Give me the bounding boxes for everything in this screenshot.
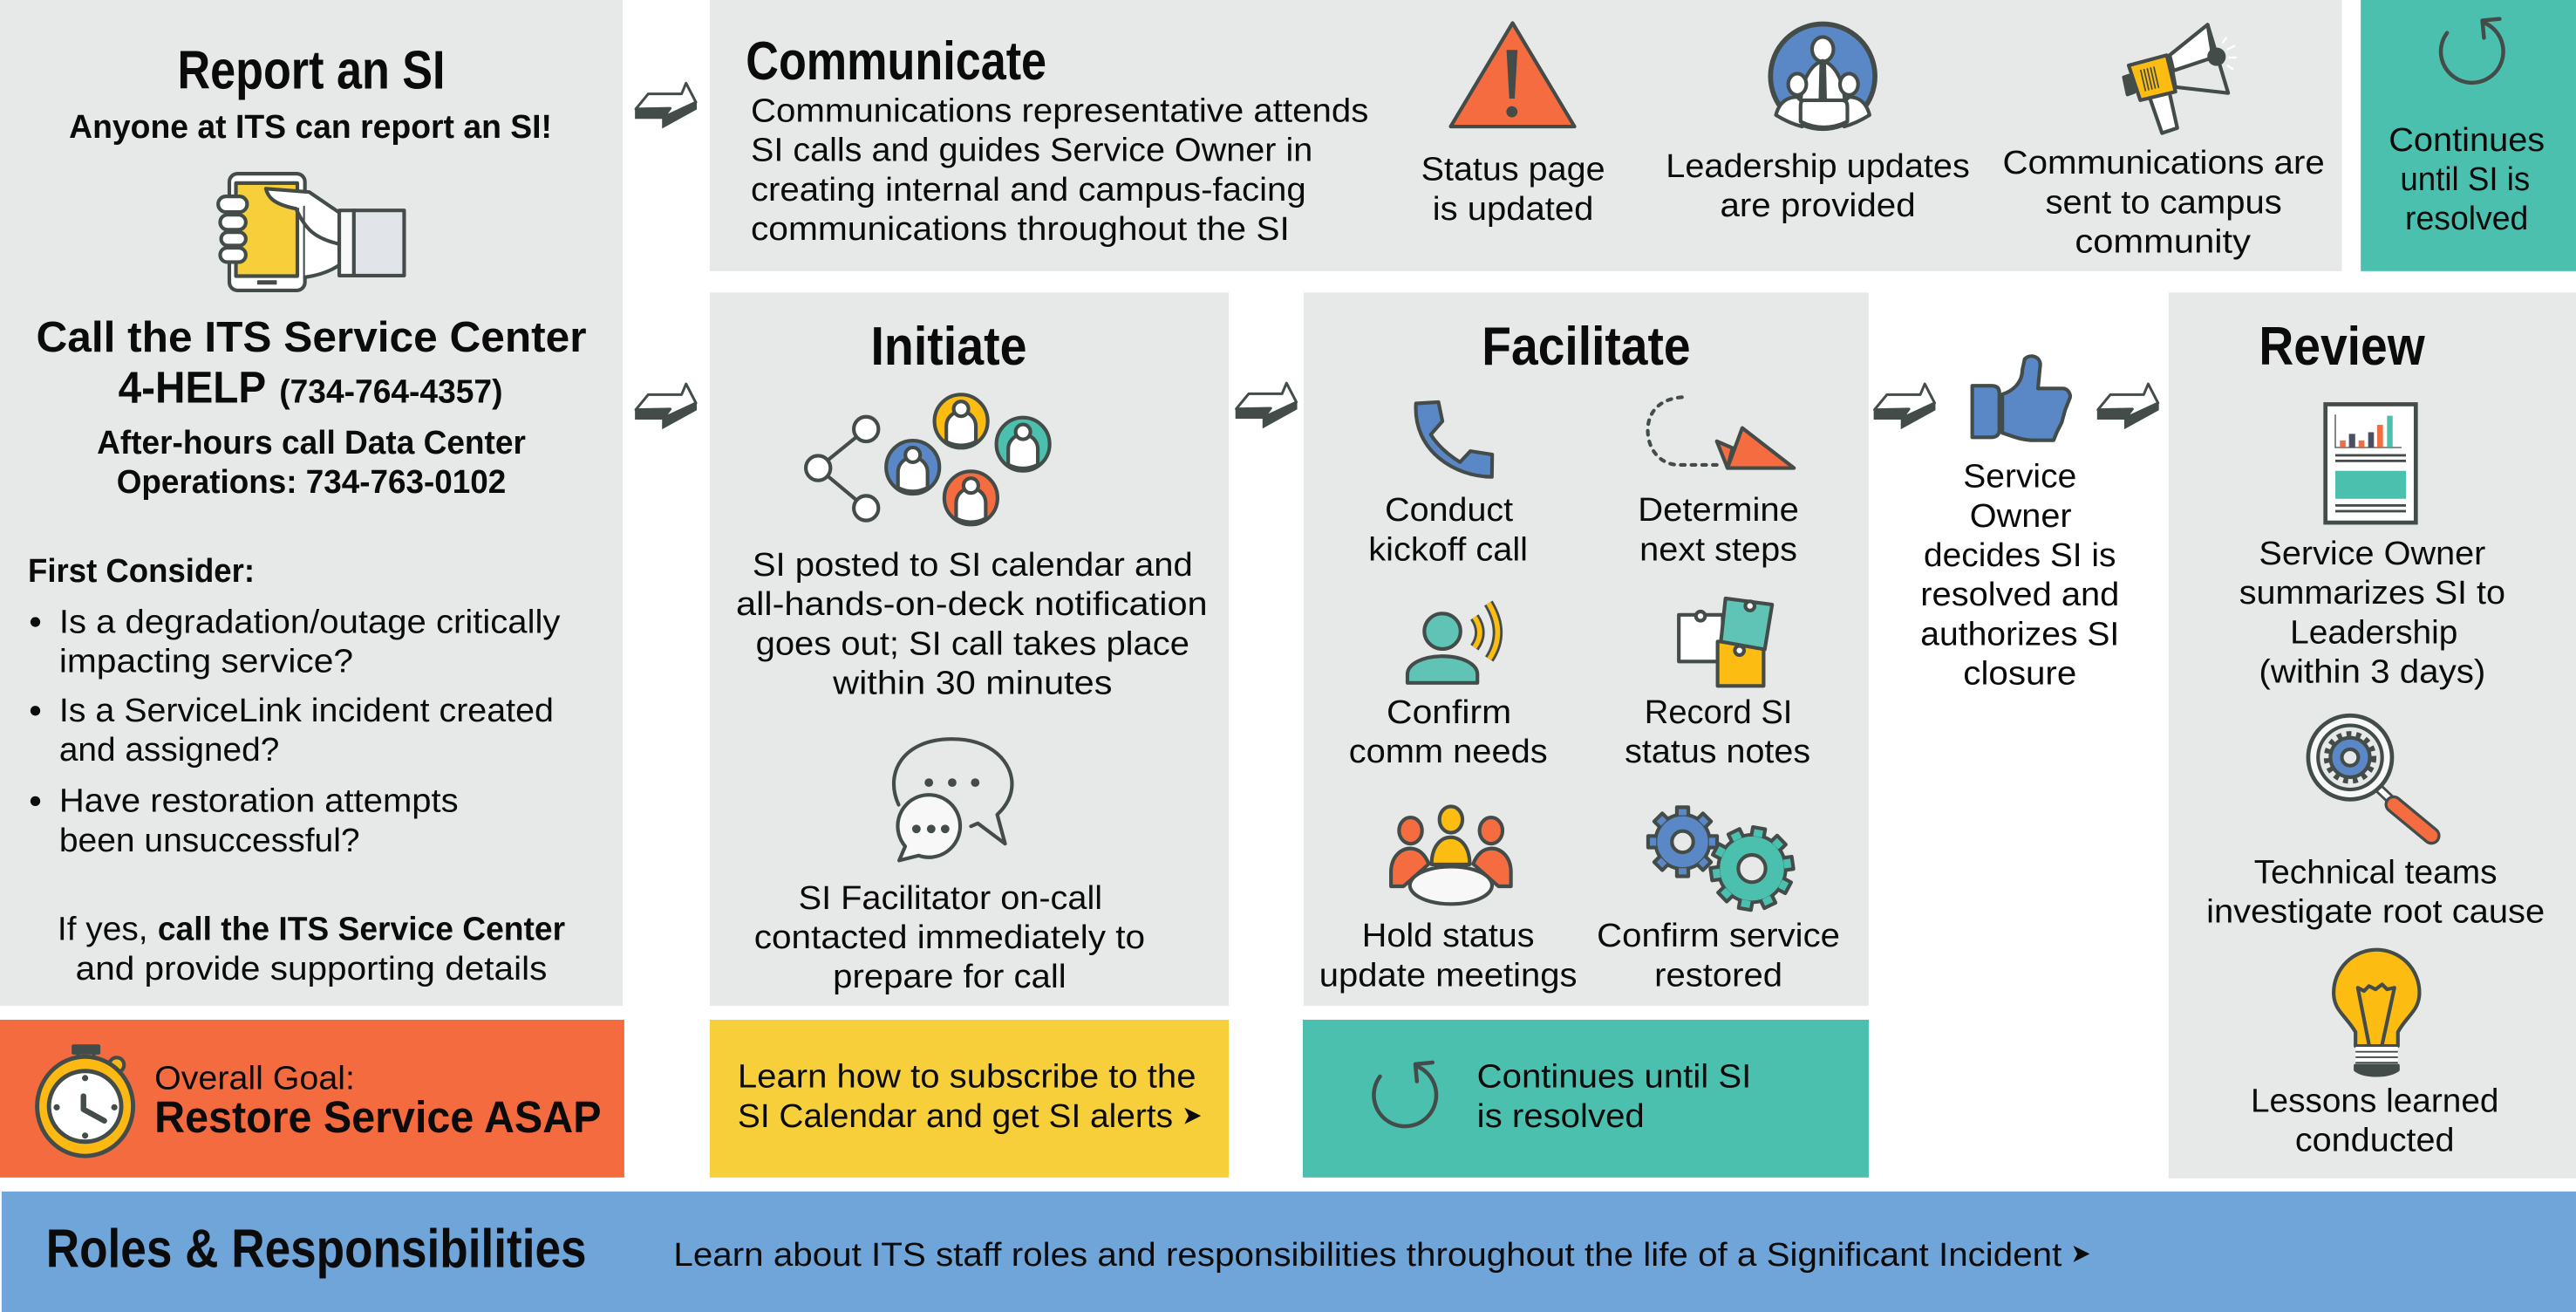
text: status page: Status page (1421, 151, 1605, 188)
icon: next steps paper plane (1648, 397, 1794, 468)
text: technical teams: Technical teams (2254, 853, 2498, 890)
text: service owner summarizes: Service Owner (2259, 535, 2485, 571)
text: service owner decides: Service (1963, 458, 2076, 495)
text: hold status update meetings: Hold status (1362, 917, 1535, 953)
icon: share network with people (806, 394, 1050, 524)
heading: initiate: Initiate (870, 317, 1026, 377)
text: SI facilitator (754, 879, 1145, 994)
text: determine next steps: next steps (1639, 530, 1797, 567)
heading: roles and responsibilities: Roles & Responsibilities (46, 1219, 587, 1279)
arrow: service owner to review (2098, 384, 2158, 428)
checklist: first consider: Have restoration attempts (59, 782, 459, 819)
text: lessons learned: Lessons learned (2251, 1082, 2498, 1118)
text: leadership updates (1666, 147, 1970, 223)
icon: loop arrow (2441, 19, 2504, 83)
text: service owner summarizes: (within 3 days) (2259, 653, 2485, 690)
text: determine next steps (1638, 491, 1799, 567)
icon: chevron (1184, 1108, 1201, 1124)
text: confirm service restored: Confirm service (1597, 917, 1840, 953)
text: conduct kickoff call (1368, 491, 1528, 567)
text: if yes call: call the ITS Service Center (158, 911, 565, 947)
text: confirm comm needs: Confirm (1387, 694, 1511, 730)
text: SI posted (736, 546, 1208, 701)
text: record SI status notes (1625, 694, 1810, 769)
text: technical teams (2206, 853, 2545, 930)
panel: facilitate (1304, 292, 1869, 1006)
panel: initiate (710, 292, 1229, 1006)
text: overall goal: Overall Goal: (154, 1059, 355, 1096)
text: learn how to subscribe: Learn how to subscribe to the (738, 1058, 1196, 1095)
text: status page: is updated (1433, 190, 1593, 227)
text: SI posted: goes out; SI call takes place (756, 625, 1189, 661)
text: continues until SI is resolved: resolved (2405, 200, 2528, 236)
text: continues until SI is resolved: Continues (2389, 121, 2545, 158)
panel: continues until resolved (facilitate) (1303, 1020, 1869, 1178)
icon: warning triangle (1451, 23, 1575, 126)
icon: thumbs up (1973, 356, 2070, 441)
text: if yes call: and provide supporting details (76, 950, 547, 987)
text: conduct kickoff call: Conduct (1385, 491, 1514, 528)
text: communications sent: Communications are (2003, 144, 2325, 181)
panel: overall goal (0, 1020, 624, 1178)
heading: review: Review (2259, 317, 2425, 377)
text: communications representative: communications throughout the SI (751, 210, 1290, 247)
text: SI facilitator: SI Facilitator on-call (799, 879, 1102, 916)
text: learn about roles: Learn about ITS staff roles and responsibilities throughout the life of a Significant Incident (673, 1236, 2062, 1273)
text: service owner decides: closure (1963, 655, 2076, 692)
text: service owner summarizes: Leadership (2290, 613, 2457, 650)
banner: roles and responsibilities (2, 1192, 2576, 1312)
icon: telephone (1416, 402, 1492, 477)
text: confirm comm needs: comm needs (1349, 733, 1548, 769)
contact: ITS service center: 4-HELP (119, 363, 266, 413)
heading: report an SI: Report an SI (177, 41, 446, 101)
contact: after-hours data center: After-hours call Data Center (97, 424, 526, 461)
icon: stopwatch (37, 1046, 133, 1156)
icon: loop arrow (1373, 1063, 1436, 1126)
text: communications representative: creating internal and campus-facing (751, 171, 1306, 208)
text: hold status update meetings: update meetings (1319, 956, 1578, 993)
text: hold status update meetings (1319, 917, 1578, 993)
arrow: report to communicate (636, 83, 696, 127)
contact: ITS service center (36, 314, 587, 413)
checklist: first consider (28, 552, 561, 858)
text: record SI status notes: Record SI (1645, 694, 1792, 730)
icon: megaphone (2124, 24, 2236, 133)
text: confirm service restored (1597, 917, 1840, 993)
icon: hand holding phone (218, 174, 404, 290)
text: leadership updates: are provided (1720, 187, 1916, 223)
icon: meeting table (1391, 806, 1511, 904)
text: service owner decides: resolved and (1920, 576, 2119, 612)
text: determine next steps: Determine (1638, 491, 1799, 528)
panel: review (2169, 292, 2576, 1179)
text: communications sent: sent to campus (2045, 183, 2282, 220)
text: if yes call: If yes, (58, 911, 148, 947)
arrow: facilitate to service owner (1875, 384, 1935, 428)
arrow: initiate to facilitate (1237, 383, 1297, 427)
text: record SI status notes: status notes (1625, 733, 1810, 769)
text: status page (1421, 151, 1605, 227)
icon: chat bubbles (894, 739, 1012, 860)
text: overall goal: Restore Service ASAP (154, 1092, 602, 1142)
text: continues until SI is resolved (2389, 121, 2545, 236)
block: service owner decision (1920, 356, 2119, 692)
text: service owner decides: authorizes SI (1920, 615, 2119, 652)
arrow: report to initiate (636, 384, 696, 428)
icon: pinned notes (1679, 598, 1772, 686)
text: service owner summarizes (2239, 535, 2505, 690)
text: SI facilitator: prepare for call (833, 958, 1067, 994)
subheading: anyone can report: Anyone at ITS can report an SI! (69, 108, 552, 145)
text: service owner decides: decides SI is (1924, 536, 2116, 573)
text: learn how to subscribe: SI Calendar and get SI alerts (738, 1097, 1173, 1134)
panel: continues until resolved (top) (2361, 0, 2576, 271)
icon: person speaking (1407, 603, 1497, 683)
icon: magnifier with gear (2308, 715, 2431, 836)
text: communications representative: SI calls and guides Service Owner in (751, 132, 1312, 168)
text: communications sent (2003, 144, 2325, 260)
text: communications sent: community (2075, 223, 2251, 260)
text: continues until SI: Continues until SI (1477, 1058, 1751, 1095)
text: service owner decides: Owner (1970, 497, 2072, 534)
text: overall goal (154, 1059, 602, 1142)
contact: ITS service center: (734-764-4357) (279, 373, 502, 410)
icon: leadership group (1770, 24, 1875, 128)
text: lessons learned: conducted (2295, 1121, 2455, 1158)
text: continues until SI (1477, 1058, 1751, 1134)
text: lessons learned (2251, 1082, 2498, 1158)
checklist: first consider: impacting service? (59, 643, 353, 680)
text: SI facilitator: contacted immediately to (754, 919, 1145, 955)
text: if yes call (58, 911, 565, 987)
text: confirm service restored: restored (1654, 956, 1782, 993)
text: communications representative (751, 92, 1368, 247)
icon: report document (2326, 404, 2416, 523)
text: service owner summarizes: summarizes SI to (2239, 574, 2505, 611)
text: learn how to subscribe (738, 1058, 1196, 1134)
contact: ITS service center: Call the ITS Service Center (36, 314, 587, 361)
checklist: first consider: Is a ServiceLink incident created (59, 692, 554, 728)
checklist: first consider: and assigned? (59, 731, 279, 768)
heading: communicate: Communicate (746, 31, 1046, 92)
contact: after-hours data center (97, 424, 526, 500)
icon: gears (1648, 807, 1794, 910)
text: confirm comm needs (1349, 694, 1548, 769)
text: SI posted: within 30 minutes (832, 665, 1112, 701)
text: communications representative: Communications representative attends (751, 92, 1368, 128)
text: SI posted: SI posted to SI calendar and (753, 546, 1193, 583)
text: technical teams: investigate root cause (2206, 893, 2545, 930)
text: SI posted: all-hands-on-deck notification (736, 585, 1208, 622)
icon: lightbulb (2334, 950, 2419, 1075)
panel: report an SI (0, 0, 623, 1006)
checklist: first consider: Is a degradation/outage critically (59, 603, 561, 639)
panel: communicate (710, 0, 2342, 271)
checklist: first consider: been unsuccessful? (59, 822, 360, 858)
text: service owner decides (1920, 458, 2119, 692)
contact: after-hours data center: Operations: 734-763-0102 (117, 463, 506, 500)
checklist: first consider: First Consider: (28, 552, 255, 589)
icon: chevron (2074, 1246, 2089, 1262)
panel: subscribe link (710, 1020, 1229, 1178)
text: leadership updates: Leadership updates (1666, 147, 1970, 184)
text: continues until SI: is resolved (1477, 1097, 1645, 1134)
text: continues until SI is resolved: until SI is (2400, 161, 2530, 197)
text: conduct kickoff call: kickoff call (1368, 530, 1528, 567)
heading: facilitate: Facilitate (1482, 317, 1691, 377)
